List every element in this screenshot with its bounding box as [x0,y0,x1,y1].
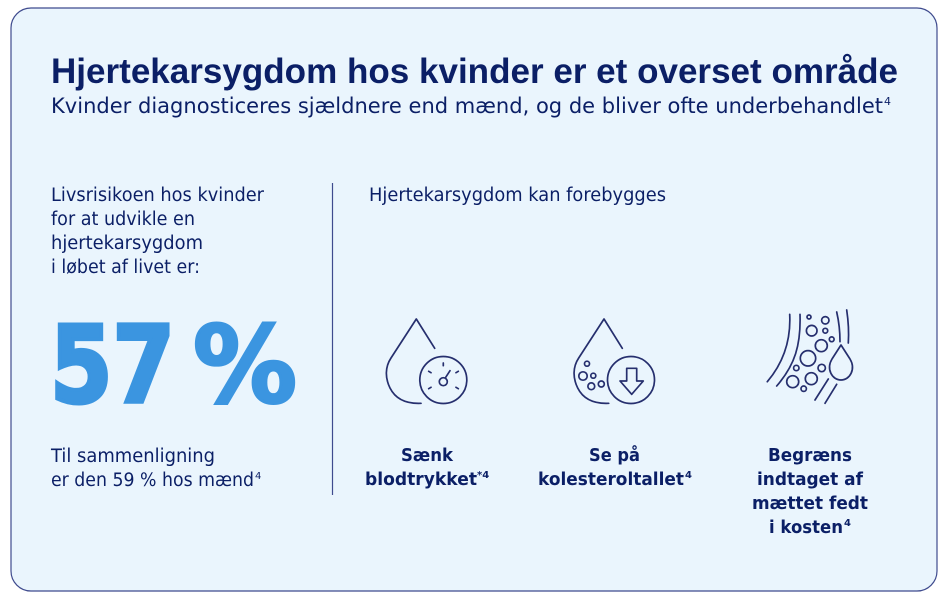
label: limit saturated fat: Begræns [768,445,852,466]
label: lower blood pressure: *4 [477,470,489,481]
text block: comparison with men: er den 59 % hos mænd [51,470,254,491]
label: limit saturated fat [752,445,868,538]
label: check cholesterol: Se på [589,444,640,466]
label: check cholesterol: 4 [685,470,692,481]
vertical divider [332,183,334,495]
icon: cholesterol drop with down arrow [574,319,654,404]
label: limit saturated fat: indtaget af [757,469,863,490]
label: lower blood pressure: Sænk [401,445,454,466]
label: limit saturated fat: mættet fedt [752,493,868,514]
text block: lifetime risk intro: hjertekarsygdom [51,233,203,254]
heading: prevention: Hjertekarsygdom kan forebygges [369,185,666,206]
text block: lifetime risk intro: for at udvikle en [51,209,195,230]
label: check cholesterol [538,444,692,490]
label: limit saturated fat: 4 [844,518,851,529]
text block: lifetime risk intro: Livsrisikoen hos kvinder [51,185,264,206]
big statistic: 57 % [50,304,297,427]
subtitle: 4 [884,95,891,108]
big statistic: 57 %: 57 [50,304,175,427]
text block: lifetime risk intro [51,185,264,278]
label: lower blood pressure [365,445,489,490]
label: lower blood pressure: blodtrykket [365,469,477,490]
title: Hjertekarsygdom hos kvinder er et overset område [51,51,898,91]
subtitle: Kvinder diagnosticeres sjældnere end mænd, og de bliver ofte underbehandlet [51,94,883,118]
icon: blood pressure drop with gauge [386,319,467,404]
label: limit saturated fat: i kosten [769,517,843,538]
icon: artery with fat particles and drop [767,310,852,403]
text block: comparison with men: 4 [255,471,261,482]
big statistic: 57 %: % [193,304,297,427]
text block: lifetime risk intro: i løbet af livet er: [51,257,200,278]
text block: comparison with men: Til sammenligning [50,446,215,467]
label: check cholesterol: kolesteroltallet [538,469,684,490]
text block: comparison with men [50,446,261,491]
